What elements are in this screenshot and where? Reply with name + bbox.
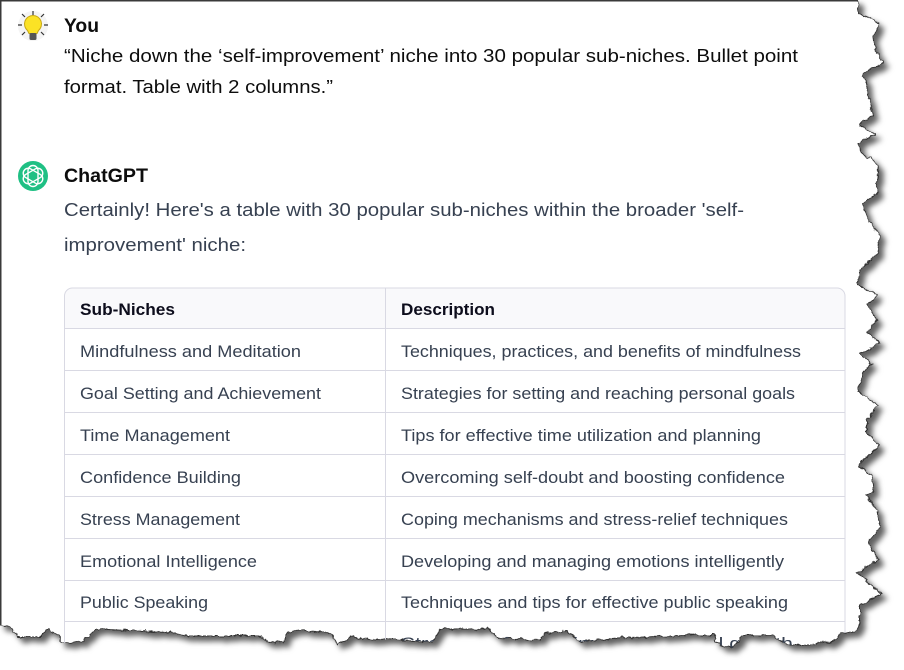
row: time management: [80, 429, 760, 444]
row: public speaking: [81, 596, 787, 612]
user prompt text: [64, 46, 798, 97]
row: public speaking: Techniques and tips for effective public speaking: [401, 594, 788, 612]
row: stress management: Stress Management: [80, 511, 240, 529]
row: stress management: [80, 513, 788, 528]
assistant message: [18, 161, 744, 255]
row: mindfulness: [82, 345, 800, 360]
row: partly cut off by torn edge: Strategies for continuous personal growth: [401, 635, 793, 653]
icon: ChatGPT logo: [18, 161, 48, 191]
row: emotional intelligence: Developing and managing emotions intelligently: [401, 553, 785, 571]
table header: Sub-Niches: [80, 301, 175, 319]
icon: light bulb avatar: [18, 11, 48, 41]
row: goal setting: Strategies for setting and reaching personal goals: [401, 385, 795, 403]
row: confidence building: Confidence Building: [80, 469, 241, 487]
table: sub-niches and descriptions: [64, 288, 845, 670]
row: emotional intelligence: [81, 555, 784, 570]
row: time management: Tips for effective time utilization and planning: [401, 427, 761, 445]
row: confidence building: Overcoming self-doubt and boosting confidence: [401, 469, 785, 487]
row: goal setting: Goal Setting and Achievement: [80, 385, 321, 403]
row: emotional intelligence: Emotional Intelligence: [80, 553, 257, 571]
row: confidence building: [80, 471, 784, 486]
assistant intro text: [64, 200, 744, 255]
assistant intro text: improvement' niche:: [64, 235, 246, 255]
user name: You: [64, 16, 99, 37]
assistant name: ChatGPT: [64, 166, 148, 187]
user prompt text: “Niche down the ‘self-improvement’ niche into 30 popular sub-niches. Bullet point: [64, 46, 798, 66]
user message: [18, 11, 798, 97]
table header: [80, 303, 494, 318]
table header: Description: [401, 301, 495, 319]
row: time management: Time Management: [80, 427, 230, 445]
row: mindfulness: Mindfulness and Meditation: [80, 343, 301, 361]
row: stress management: Coping mechanisms and stress-relief techniques: [401, 511, 788, 529]
user prompt text: format. Table with 2 columns.”: [64, 77, 333, 97]
assistant intro text: Certainly! Here's a table with 30 popular sub-niches within the broader 'self-: [64, 200, 744, 220]
row: public speaking: Public Speaking: [80, 594, 208, 612]
row: goal setting: [80, 387, 794, 402]
row: mindfulness: Techniques, practices, and benefits of mindfulness: [401, 343, 801, 361]
